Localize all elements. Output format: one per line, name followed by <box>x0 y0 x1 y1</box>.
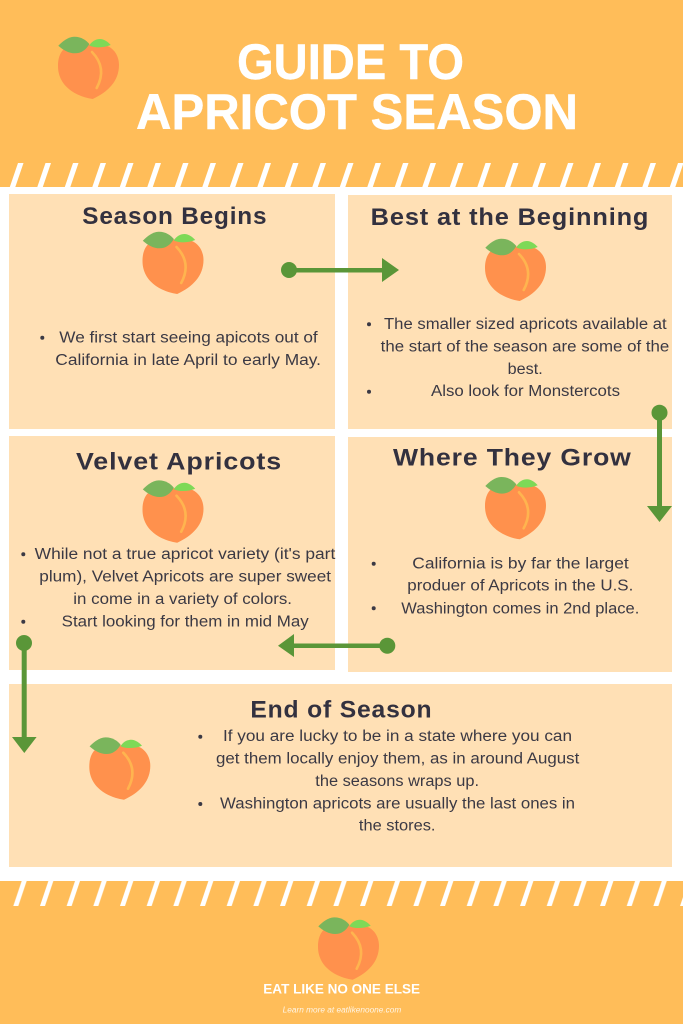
arrow: best at the beginning to where they grow <box>647 405 672 522</box>
footer brand: EAT LIKE NO ONE ELSE <box>263 981 420 996</box>
text block: best at the beginning: best. <box>508 361 543 378</box>
text block: where they grow <box>372 555 639 617</box>
footer link: Learn more at eatlikenoone.com <box>283 1005 402 1014</box>
panel: season begins <box>9 194 335 429</box>
title <box>136 34 578 140</box>
text block: end of season: get them locally enjoy them, as in around August <box>216 751 580 768</box>
footer band <box>0 881 683 1024</box>
text block: best at the beginning <box>367 316 669 400</box>
icon: peach <box>485 239 546 301</box>
text block: where they grow: produer of Apricots in the U.S. <box>407 578 633 595</box>
icon: peach <box>485 477 546 539</box>
text block: end of season: If you are lucky to be in a state where you can <box>223 728 572 745</box>
text block: where they grow: California is by far the larget <box>412 555 629 572</box>
icon: footer peach <box>318 917 379 980</box>
heading: end of season: End of Season <box>250 697 432 724</box>
title: GUIDE TO <box>237 34 464 90</box>
arrow: velvet apricots to end of season <box>12 635 37 753</box>
text block: best at the beginning: the start of the season are some of the <box>381 339 669 356</box>
text block: velvet apricots: While not a true apricot variety (it's part <box>35 546 336 563</box>
icon: peach <box>142 480 204 543</box>
text block: season begins: We first start seeing apicots out of <box>59 330 318 347</box>
text block: velvet apricots: in come in a variety of colors. <box>73 591 292 608</box>
heading: velvet apricots: Velvet Apricots <box>76 448 282 475</box>
icon: peach <box>142 232 204 294</box>
text block: where they grow: Washington comes in 2nd place. <box>401 600 639 617</box>
icon: header peach <box>58 37 119 99</box>
text block: end of season <box>198 728 580 835</box>
text block: end of season: the stores. <box>359 818 436 835</box>
panel: end of season <box>9 684 672 867</box>
header band <box>0 0 683 187</box>
heading: best at the beginning: Best at the Beginning <box>371 204 649 231</box>
text block: best at the beginning: Also look for Monstercots <box>431 383 620 400</box>
text block: velvet apricots: plum), Velvet Apricots are super sweet <box>39 569 332 586</box>
text block: end of season: Washington apricots are usually the last ones in <box>220 795 575 812</box>
panel: where they grow <box>348 437 672 672</box>
icon: peach <box>89 737 150 800</box>
text block: season begins <box>40 330 321 369</box>
arrow: season begins to best at the beginning <box>281 258 399 282</box>
title: APRICOT SEASON <box>136 84 578 140</box>
text block: best at the beginning: The smaller sized apricots available at <box>384 316 667 333</box>
text block: season begins: California in late April to early May. <box>55 352 321 369</box>
heading: season begins: Season Begins <box>82 203 267 230</box>
panel: velvet apricots <box>9 436 336 670</box>
panel: best at the beginning <box>348 195 672 429</box>
arrow: where they grow to velvet apricots <box>278 634 395 657</box>
text block: end of season: the seasons wraps up. <box>315 773 479 790</box>
text block: velvet apricots <box>21 546 336 631</box>
text block: velvet apricots: Start looking for them in mid May <box>62 614 309 631</box>
heading: where they grow: Where They Grow <box>393 445 632 472</box>
